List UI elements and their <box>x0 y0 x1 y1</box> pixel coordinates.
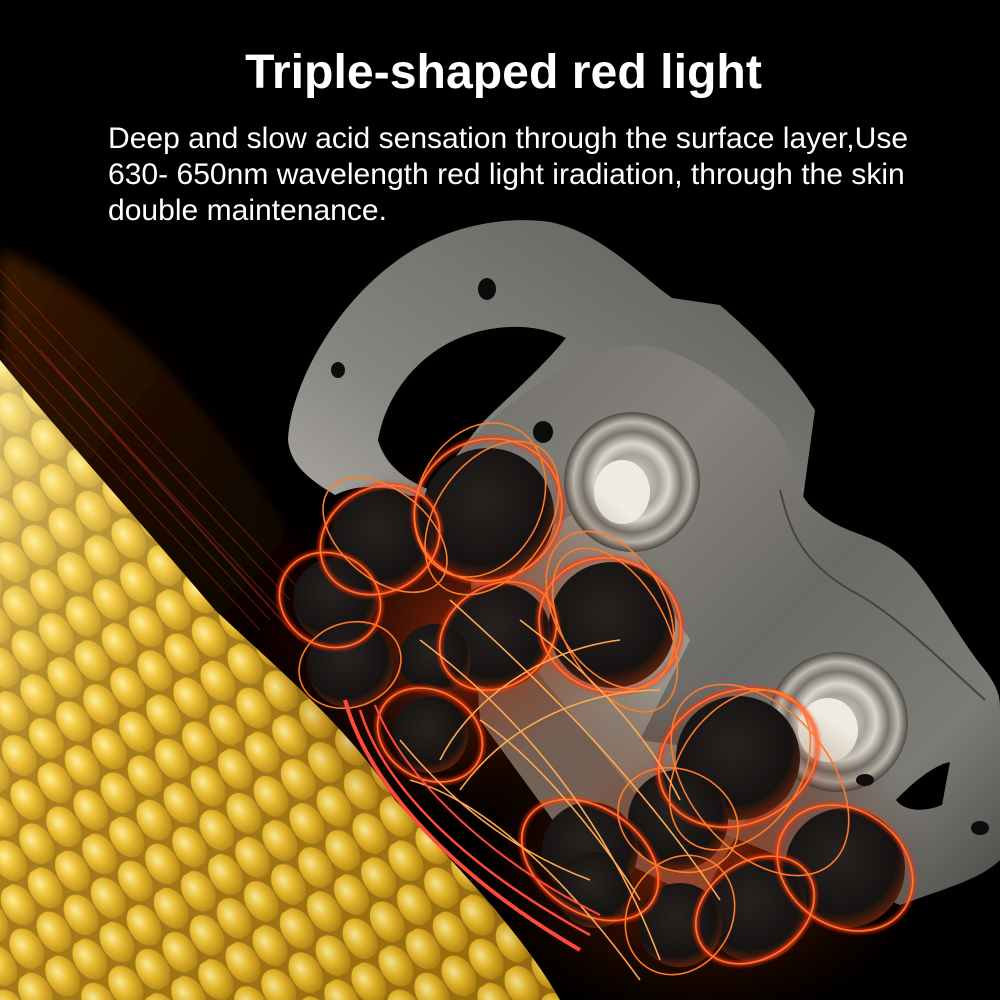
massage balls <box>293 448 905 967</box>
small screw holes <box>331 278 989 835</box>
description text: double maintenance. <box>108 194 387 227</box>
description text: 630- 650nm wavelength red light iradiation, through the skin <box>108 158 905 191</box>
orange light rings <box>262 401 937 995</box>
description text: Deep and slow acid sensation through the surface layer,Use <box>108 122 908 155</box>
red glow behind massage balls <box>260 450 930 1000</box>
main body <box>440 345 1000 905</box>
golden textured tissue <box>0 360 560 1000</box>
lower right handle gap <box>896 762 950 810</box>
suction cup upper <box>564 412 700 552</box>
blurred red light halo <box>262 412 937 986</box>
inner light plate <box>470 500 780 900</box>
description text <box>108 122 908 227</box>
suction cup lower <box>768 652 908 792</box>
bright light streaks <box>400 600 720 980</box>
body seam <box>780 490 985 700</box>
warm glow above texture <box>0 250 420 760</box>
handle loop top left <box>288 220 815 560</box>
red arc on skin <box>345 700 600 950</box>
title: Triple-shaped red light <box>245 45 762 99</box>
device body <box>288 220 1000 905</box>
